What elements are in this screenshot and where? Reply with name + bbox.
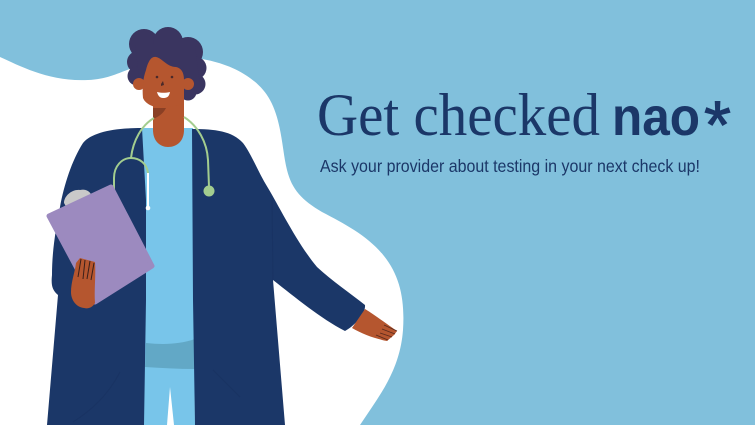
neck: [153, 100, 184, 147]
asterisk: *: [704, 87, 731, 163]
hand on clipboard: [71, 258, 95, 308]
coat right side and sleeve: [192, 129, 365, 425]
clipboard: [49, 187, 152, 302]
stethoscope white tip: [146, 206, 150, 210]
stethoscope chest piece: [204, 186, 214, 196]
subtitle: Ask your provider about testing in your next check up!: [320, 156, 700, 176]
eyes and nose: [156, 76, 173, 86]
right ear: [182, 78, 194, 90]
fingers: [78, 259, 94, 280]
scrub waist band: [145, 339, 195, 369]
white blob: [0, 57, 403, 425]
title serif part: Get checked: [317, 82, 600, 148]
title bold part: nao: [612, 87, 700, 147]
neck shadow: [153, 108, 166, 119]
face: [143, 57, 184, 108]
stethoscope: [114, 117, 214, 210]
outstretched hand: [352, 309, 397, 341]
gap between legs: [167, 387, 174, 425]
doctor figure: [47, 27, 397, 425]
coat folds: [73, 200, 273, 422]
stethoscope white tube: [147, 173, 149, 207]
scrub top: [142, 128, 195, 425]
title: [317, 82, 731, 163]
clipboard clip: [64, 190, 92, 210]
outstretched fingers: [376, 325, 397, 340]
left ear: [133, 78, 145, 90]
hair: [127, 27, 206, 100]
coat left side: [47, 128, 146, 425]
smile: [157, 92, 170, 98]
